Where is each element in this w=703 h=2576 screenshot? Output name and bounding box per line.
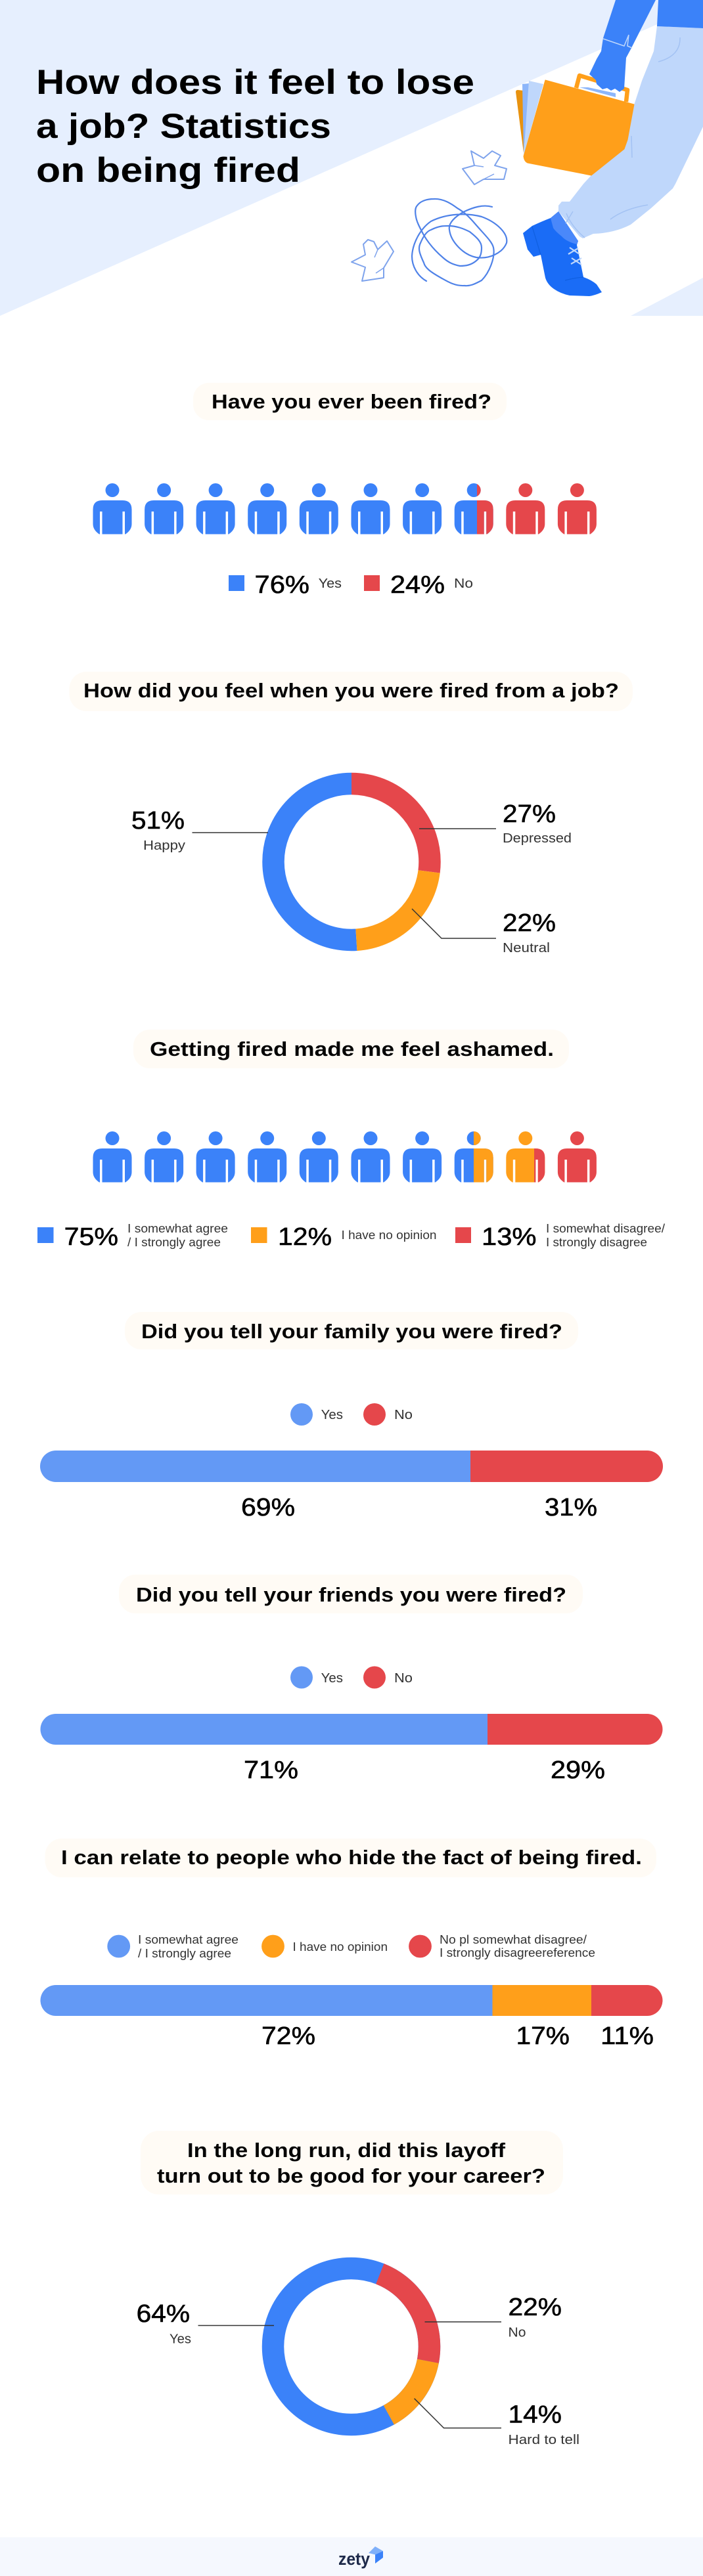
bar values: 72% [261, 2022, 315, 2050]
panel: tell your friends [40, 1575, 662, 1784]
bar values: 71% [244, 1757, 298, 1784]
legend: I have no opinion [293, 1940, 388, 1954]
legend: No [454, 577, 473, 591]
title: How does it feel to lose [36, 63, 474, 102]
panel: have you ever been fired [93, 383, 597, 599]
footer [0, 2537, 703, 2576]
title: on being fired [36, 151, 300, 190]
callout: depressed: 27% [503, 800, 556, 828]
donut chart [273, 2268, 430, 2424]
heading [45, 1839, 656, 1877]
icon: briefcase [516, 76, 634, 175]
panel: long run [137, 2131, 579, 2447]
legend: Yes [321, 1408, 343, 1422]
legend: / I strongly agree [138, 1947, 231, 1960]
bar values: 29% [551, 1757, 605, 1784]
bar values [241, 1494, 597, 1521]
callout: neutral [412, 909, 556, 955]
logo: zety: zety [338, 2549, 370, 2569]
heading: turn out to be good for your career? [157, 2164, 545, 2187]
legend: Yes [319, 577, 342, 591]
bar values: 17% [516, 2022, 570, 2050]
heading: Have you ever been fired? [212, 390, 491, 413]
callout: happy: Happy [143, 839, 185, 853]
legend: I somewhat agree [138, 1933, 238, 1946]
stacked bar [40, 1985, 662, 2016]
callout: hard to tell: Hard to tell [509, 2433, 579, 2447]
legend [37, 1222, 665, 1251]
title [36, 63, 474, 190]
heading [125, 1312, 578, 1349]
bar values [261, 2022, 654, 2050]
heading [70, 672, 633, 711]
callout: neutral: Neutral [503, 941, 550, 955]
donut chart [273, 784, 430, 940]
bar values: 11% [601, 2022, 654, 2050]
legend: No [394, 1671, 413, 1686]
callout: hard to tell [415, 2399, 579, 2447]
legend: 13% [482, 1223, 536, 1251]
callout: happy [131, 807, 268, 853]
panel: ashamed [37, 1030, 665, 1251]
legend [229, 571, 473, 599]
illustration: person walking with briefcase [352, 0, 703, 296]
legend: 75% [64, 1223, 118, 1251]
panel: how did you feel [70, 672, 633, 955]
title: a job? Statistics [36, 107, 331, 146]
heading: Did you tell your family you were fired? [141, 1320, 562, 1343]
panel: tell your family [40, 1312, 663, 1521]
heading [133, 1030, 569, 1068]
panel: relate to people who hide [40, 1839, 662, 2050]
icon: crumpled paper bottom [352, 240, 394, 281]
legend: 24% [390, 571, 445, 599]
legend: Yes [321, 1671, 343, 1686]
icon: crumpled paper top [463, 151, 507, 185]
callout: neutral: 22% [503, 909, 556, 937]
heading [119, 1575, 583, 1613]
pictogram: ten people 75 12 13 percent [93, 1131, 597, 1182]
heading [193, 383, 507, 420]
callout: yes: 64% [137, 2300, 190, 2328]
icon: arm and shirt [589, 0, 703, 92]
legend: I have no opinion [342, 1229, 436, 1242]
icon: trousers [558, 26, 703, 238]
heading: Getting fired made me feel ashamed. [150, 1037, 554, 1060]
logo: zety [338, 2546, 383, 2569]
legend: No [394, 1408, 413, 1422]
legend: / I strongly agree [127, 1236, 221, 1249]
legend: 76% [255, 571, 309, 599]
legend: 12% [278, 1223, 332, 1251]
icon: scribble [412, 199, 507, 286]
stacked bar [40, 1451, 663, 1482]
callout: yes: Yes [170, 2332, 191, 2347]
bar values [244, 1757, 605, 1784]
legend: I somewhat agree [127, 1222, 228, 1235]
heading: How did you feel when you were fired from a job? [83, 679, 619, 702]
heading [141, 2131, 563, 2194]
callout: hard to tell: 14% [509, 2401, 562, 2428]
icon: shoe [523, 211, 602, 296]
legend [107, 1933, 595, 1960]
pictogram: ten people 76 percent yes [93, 483, 597, 535]
legend: I strongly disagree [546, 1236, 647, 1249]
legend: I strongly disagreereference [440, 1946, 595, 1959]
legend [290, 1403, 413, 1426]
heading: In the long run, did this layoff [187, 2139, 506, 2162]
callout: happy: 51% [131, 807, 185, 835]
callout: yes [137, 2300, 274, 2347]
callout: depressed [419, 800, 572, 846]
hero background [0, 0, 703, 316]
heading: I can relate to people who hide the fact of being fired. [61, 1846, 642, 1869]
bar values: 69% [241, 1494, 295, 1521]
legend: No pl somewhat disagree/ [440, 1933, 587, 1946]
heading: Did you tell your friends you were fired? [136, 1583, 566, 1606]
callout: no: 22% [509, 2294, 562, 2321]
callout: no [424, 2294, 562, 2340]
stacked bar [40, 1714, 662, 1745]
bar values: 31% [545, 1494, 597, 1521]
callout: no: No [509, 2326, 526, 2340]
legend [290, 1667, 413, 1689]
legend: I somewhat disagree/ [546, 1222, 665, 1235]
callout: depressed: Depressed [503, 831, 572, 846]
